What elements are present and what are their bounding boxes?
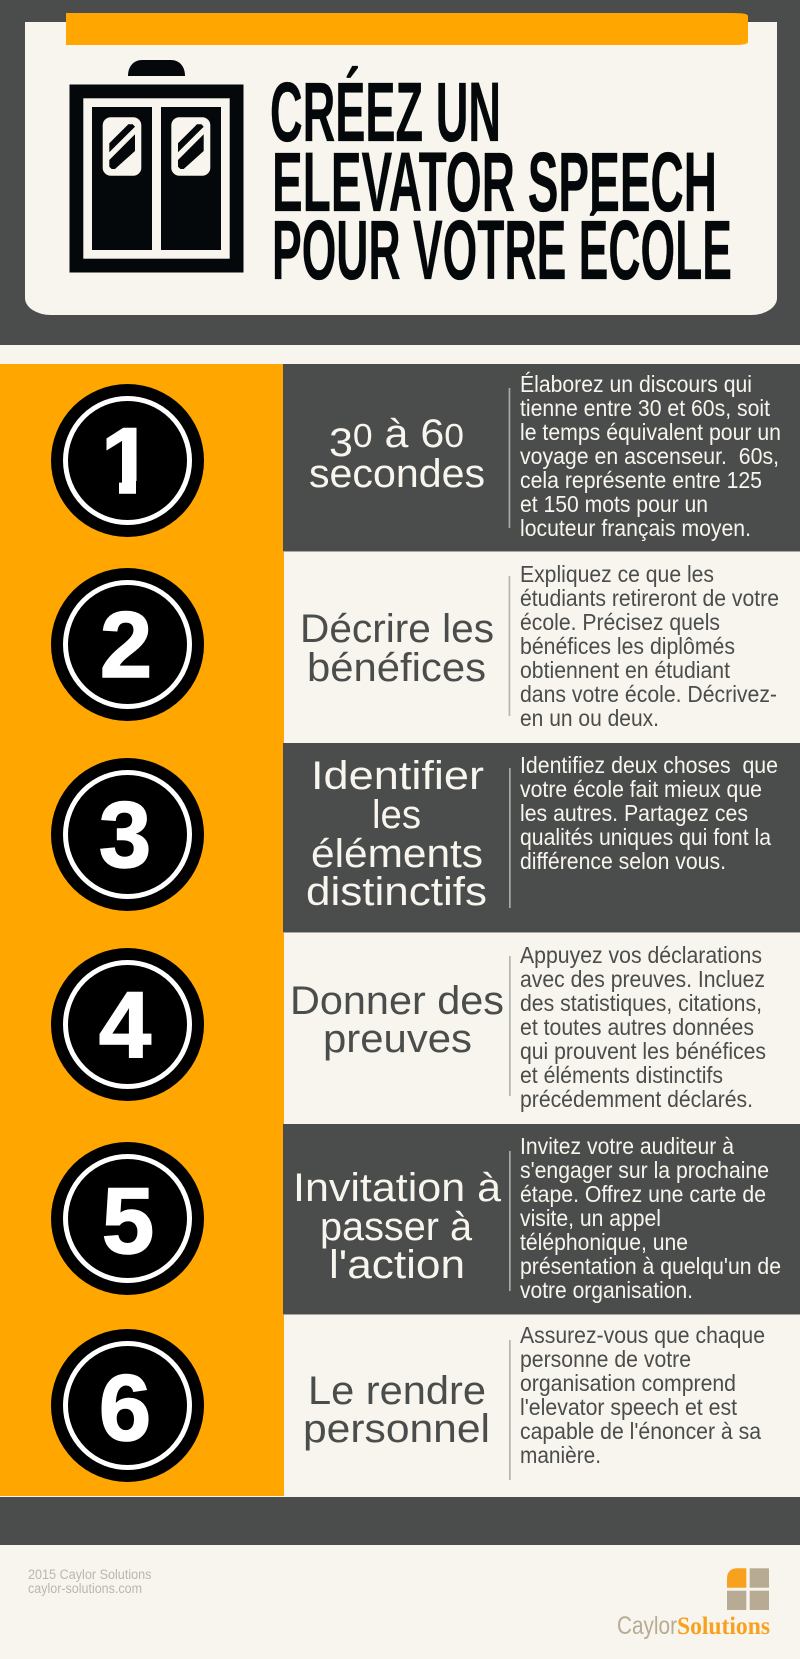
step description: votre école fait mieux que: [520, 776, 762, 802]
step heading: [306, 754, 487, 914]
step description: et éléments distinctifs: [520, 1062, 723, 1088]
number badge 3: 3: [99, 782, 151, 887]
panel: header: [0, 0, 800, 345]
step heading: [293, 1166, 502, 1287]
number badge 1: [51, 384, 204, 537]
step heading: à 60: [384, 412, 463, 456]
step description: capable de l'énoncer à sa: [520, 1418, 761, 1444]
step description: avec des preuves. Incluez: [520, 966, 765, 992]
panel: orange number column: [0, 364, 284, 1496]
step description: différence selon vous.: [520, 848, 726, 874]
step description: Invitez votre auditeur à: [520, 1133, 734, 1159]
step description: et toutes autres données: [520, 1014, 754, 1040]
step heading: distinctifs: [306, 870, 487, 914]
step description: s'engager sur la prochaine: [520, 1157, 769, 1183]
number badge 6: [51, 1329, 204, 1482]
step heading: Le rendre: [308, 1369, 486, 1413]
copyright text: caylor-solutions.com: [28, 1581, 142, 1596]
divider: [509, 768, 511, 908]
panel: step 6: [51, 1315, 800, 1496]
step description: les autres. Partagez ces: [520, 800, 748, 826]
step description: qualités uniques qui font la: [520, 824, 771, 850]
step heading: Invitation à: [293, 1166, 502, 1210]
step description: précédemment déclarés.: [520, 1086, 753, 1112]
step description: manière.: [520, 1442, 601, 1468]
step description: personne de votre: [520, 1346, 691, 1372]
step heading: les: [372, 793, 421, 837]
step heading: personnel: [303, 1407, 490, 1451]
step description: présentation à quelqu'un de: [520, 1253, 781, 1279]
number badge 4: 4: [99, 972, 151, 1077]
step description: [520, 561, 779, 731]
divider: [509, 576, 510, 716]
step description: en un ou deux.: [520, 705, 659, 731]
panel: step 4: [51, 933, 800, 1124]
step description: [520, 752, 778, 874]
step heading: secondes: [309, 452, 485, 496]
step heading: Donner des: [290, 979, 504, 1023]
copyright text: [28, 1567, 152, 1596]
number badge 3: [51, 758, 204, 911]
step description: téléphonique, une: [520, 1229, 688, 1255]
step description: obtiennent en étudiant: [520, 657, 731, 683]
title: [270, 65, 732, 297]
title: CRÉEZ UN: [270, 65, 501, 159]
step heading: passer à: [320, 1205, 473, 1249]
number badge 2: [51, 568, 204, 721]
panel: step 5: [51, 1124, 800, 1315]
step heading: Identifier: [311, 754, 484, 798]
panel: step 3: [51, 743, 800, 933]
step description: [520, 942, 766, 1112]
header card: [25, 22, 777, 315]
step description: cela représente entre 125: [520, 467, 762, 493]
step description: locuteur français moyen.: [520, 515, 751, 541]
divider: [509, 1151, 511, 1291]
panel: step 1: [51, 364, 800, 552]
icon: elevator: [70, 60, 244, 272]
divider: [509, 956, 511, 1096]
step heading: [309, 412, 485, 496]
step description: l'elevator speech et est: [520, 1394, 738, 1420]
step description: le temps équivalent pour un: [520, 419, 781, 445]
step description: des statistiques, citations,: [520, 990, 762, 1016]
divider: [509, 388, 510, 528]
step description: [520, 371, 781, 541]
number badge 2: 2: [100, 592, 152, 697]
copyright text: 2015 Caylor Solutions: [28, 1567, 152, 1582]
step heading: l'action: [329, 1243, 465, 1287]
step heading: preuves: [323, 1017, 472, 1061]
orange title bar: [66, 13, 748, 45]
step description: étape. Offrez une carte de: [520, 1181, 766, 1207]
logo: Caylor Solutions: Solutions: [677, 1613, 770, 1640]
step description: votre organisation.: [520, 1277, 693, 1303]
step heading: 3: [329, 421, 353, 465]
divider: [509, 1340, 511, 1480]
step description: Appuyez vos déclarations: [520, 942, 762, 968]
step description: étudiants retireront de votre: [520, 585, 779, 611]
number badge 4: [51, 948, 204, 1101]
step description: qui prouvent les bénéfices: [520, 1038, 766, 1064]
step heading: 0: [353, 417, 373, 454]
step heading: [300, 607, 494, 690]
step description: école. Précisez quels: [520, 609, 720, 635]
step description: tienne entre 30 et 60s, soit: [520, 395, 771, 421]
step description: voyage en ascenseur. 60s,: [520, 443, 779, 469]
step description: bénéfices les diplômés: [520, 633, 735, 659]
step heading: éléments: [311, 832, 483, 876]
step heading: bénéfices: [307, 646, 486, 690]
number badge 5: [51, 1142, 204, 1295]
step description: visite, un appel: [520, 1205, 661, 1231]
step description: Expliquez ce que les: [520, 561, 714, 587]
number badge 1: 1: [101, 408, 153, 513]
step description: dans votre école. Décrivez-: [520, 681, 777, 707]
step description: et 150 mots pour un: [520, 491, 708, 517]
logo: Caylor Solutions: Caylor: [617, 1612, 677, 1640]
step heading: Décrire les: [300, 607, 494, 651]
step description: organisation comprend: [520, 1370, 736, 1396]
step description: Assurez-vous que chaque: [520, 1322, 765, 1348]
panel: step 2: [51, 552, 800, 743]
dark footer band: [0, 1497, 800, 1545]
step heading: [303, 1369, 490, 1451]
number badge 6: 6: [99, 1355, 151, 1460]
logo: Caylor Solutions: [617, 1568, 770, 1640]
number badge 5: 5: [102, 1168, 154, 1273]
step description: Élaborez un discours qui: [520, 371, 752, 397]
step description: [520, 1322, 765, 1468]
step description: Identifiez deux choses que: [520, 752, 778, 778]
step description: [520, 1133, 781, 1303]
step heading: [290, 979, 504, 1061]
